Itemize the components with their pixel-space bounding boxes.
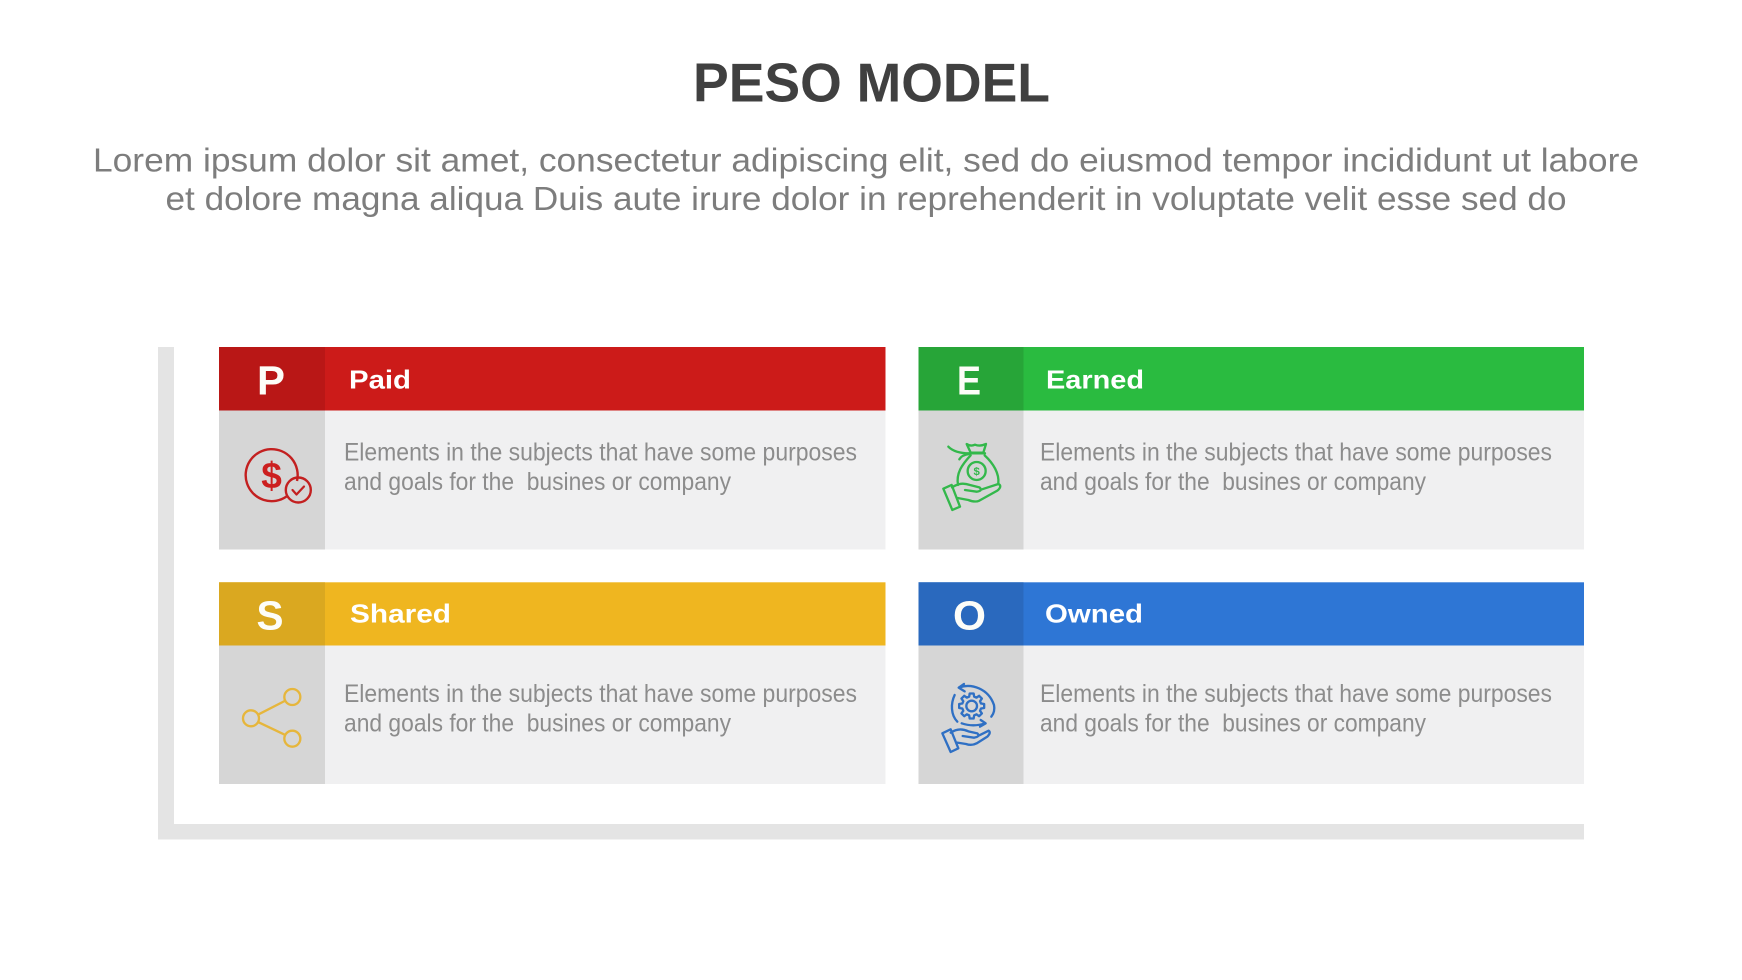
subtitle text block: [93, 142, 1639, 217]
panel: earned: [918, 347, 1584, 550]
description: shared: and goals for the busines or company: [344, 709, 731, 737]
panel: shared: [219, 582, 886, 784]
panel: owned: [918, 582, 1584, 784]
icon: dollar coin with check: [246, 449, 311, 502]
icon: money bag on hand: [943, 444, 1000, 510]
letter E: E: [957, 357, 981, 403]
letter O: O: [953, 593, 986, 639]
subtitle text block: Lorem ipsum dolor sit amet, consectetur adipiscing elit, sed do eiusmod tempor incididunt ut labore: [93, 142, 1639, 179]
letter S: S: [256, 593, 284, 639]
heading: owned: Owned: [1045, 598, 1143, 628]
subtitle text block: et dolore magna aliqua Duis aute irure dolor in reprehenderit in voluptate velit esse sed do: [166, 180, 1566, 217]
description: earned: Elements in the subjects that have some purposes: [1040, 439, 1552, 467]
panel: paid: [219, 347, 886, 550]
icon: dollar coin with check: $: [261, 455, 282, 496]
description: paid: Elements in the subjects that have some purposes: [344, 439, 857, 467]
L-shaped frame behind the cards: [158, 347, 1584, 840]
description: shared: Elements in the subjects that have some purposes: [344, 680, 857, 708]
description: shared: [344, 680, 857, 737]
description: earned: [1040, 439, 1552, 496]
heading: shared: Shared: [350, 598, 451, 628]
heading: paid: Paid: [349, 364, 411, 394]
icon: share nodes: [243, 689, 300, 747]
description: owned: [1040, 680, 1552, 737]
description: paid: and goals for the busines or company: [344, 468, 731, 496]
description: owned: and goals for the busines or company: [1040, 709, 1426, 737]
description: owned: Elements in the subjects that have some purposes: [1040, 680, 1552, 708]
icon: money bag on hand: $: [974, 466, 981, 478]
title: PESO MODEL: [693, 52, 1050, 114]
heading: earned: Earned: [1046, 364, 1144, 394]
description: earned: and goals for the busines or company: [1040, 468, 1426, 496]
icon: gear with cycle arrows on hand: [942, 684, 994, 752]
letter P: P: [257, 357, 285, 403]
description: paid: [344, 439, 857, 496]
